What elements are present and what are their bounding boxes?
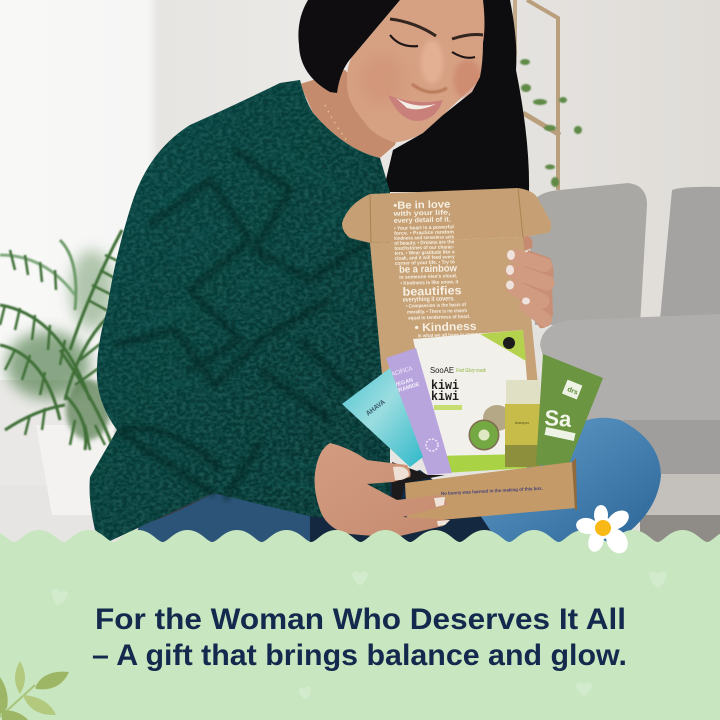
headline line 2: – A gift that brings balance and glow. [92,639,627,672]
product: dr botanicals green tube: drs [566,386,579,397]
printed lid message [392,198,486,340]
right hand nails [506,250,530,304]
faint hearts [49,572,667,701]
product: pacifica purple tube: PACIFICA [388,366,413,379]
green knit sweater [90,80,390,541]
box front panel [405,462,576,523]
product: sooae kiwi sheet mask: Fool Glory mask [456,368,486,374]
woman: front hair [298,0,400,93]
printed lid message: force. • Practice random [394,229,455,237]
printed lid message: touchstones of our charac- [394,244,455,252]
printed lid message: equal to tenderness of heart. [408,314,471,322]
printed lid message: every detail of it. [394,216,451,225]
product: dr botanicals green tube [536,354,603,466]
printed lid message: of beauty. • Dreams are the [394,239,455,247]
gift box [342,188,603,523]
eyes [390,35,475,58]
printed lid message: in someone else's cloud. [399,273,458,281]
box lid inner panel [370,237,538,385]
potted plant [0,230,122,515]
eyebrows [390,19,483,39]
headline line 1: For the Woman Who Deserves It All [95,603,626,636]
product: dr botanicals green tube: Sa [544,405,573,432]
product: sooae kiwi sheet mask: SooAE [430,366,454,375]
background wall and curtain [0,0,720,545]
printed lid message: corner of your life. • Try to [395,259,455,267]
jeans [130,418,661,545]
printed lid message: kindness and senseless acts [394,234,454,242]
box top flap [342,188,551,243]
product: pacifica purple tube [386,348,452,475]
headline [92,603,627,672]
printed lid message: cloak, and it will feed every [395,254,455,262]
product: pacifica purple tube: CERAMIDE [391,382,421,396]
product: ahava teal tube [342,368,423,467]
right hand [506,250,554,328]
right hand behind lid [518,235,532,252]
nose [412,84,447,92]
printed lid message: morality. • There is no charm [407,308,468,316]
product: yellow bottle: shampoo [515,421,529,425]
printed lid message: • Your heart is a powerful [394,224,455,232]
green wavy panel [0,530,720,720]
grey sofa [528,183,720,545]
wooden shelf with ivy [513,0,582,190]
leaf sprig [0,661,69,720]
necklace [325,105,348,142]
printed lid message: be a rainbow [399,263,457,276]
printed lid message: ters. • Wear gratitude like a [394,249,455,257]
left hand holding box [315,443,450,536]
printed lid message: everything it covers. [403,295,455,304]
daisy flower [575,505,632,557]
product: ahava teal tube: AHAVA [365,399,387,418]
product: sooae kiwi sheet mask: kiwi [431,378,459,393]
product: sooae kiwi sheet mask [413,330,527,473]
box front small print: No bunny was harmed in the making of this box. [441,486,543,496]
woman: face [347,0,490,142]
printed lid message: with your life, [392,209,451,218]
printed lid message: • Kindness [414,321,477,334]
printed lid message: • Compassion is the basis of [406,302,466,310]
printed lid message: • Kindness is like snow, it [400,279,459,287]
product: sooae kiwi sheet mask: kiwi [431,389,459,404]
woman: long hair [383,0,529,192]
printed lid message: is what we all have in common. [418,332,486,339]
product: pacifica purple tube: VEGAN [393,377,414,389]
product: yellow bottle [505,380,540,467]
mouth [388,95,443,121]
photo scene [0,0,720,545]
flap fold lines [370,188,523,243]
printed lid message: beautifies [402,283,462,299]
printed lid message: •Be in love [393,198,451,212]
woman: neck and chest [300,70,400,158]
box inner dark gap [392,462,445,522]
